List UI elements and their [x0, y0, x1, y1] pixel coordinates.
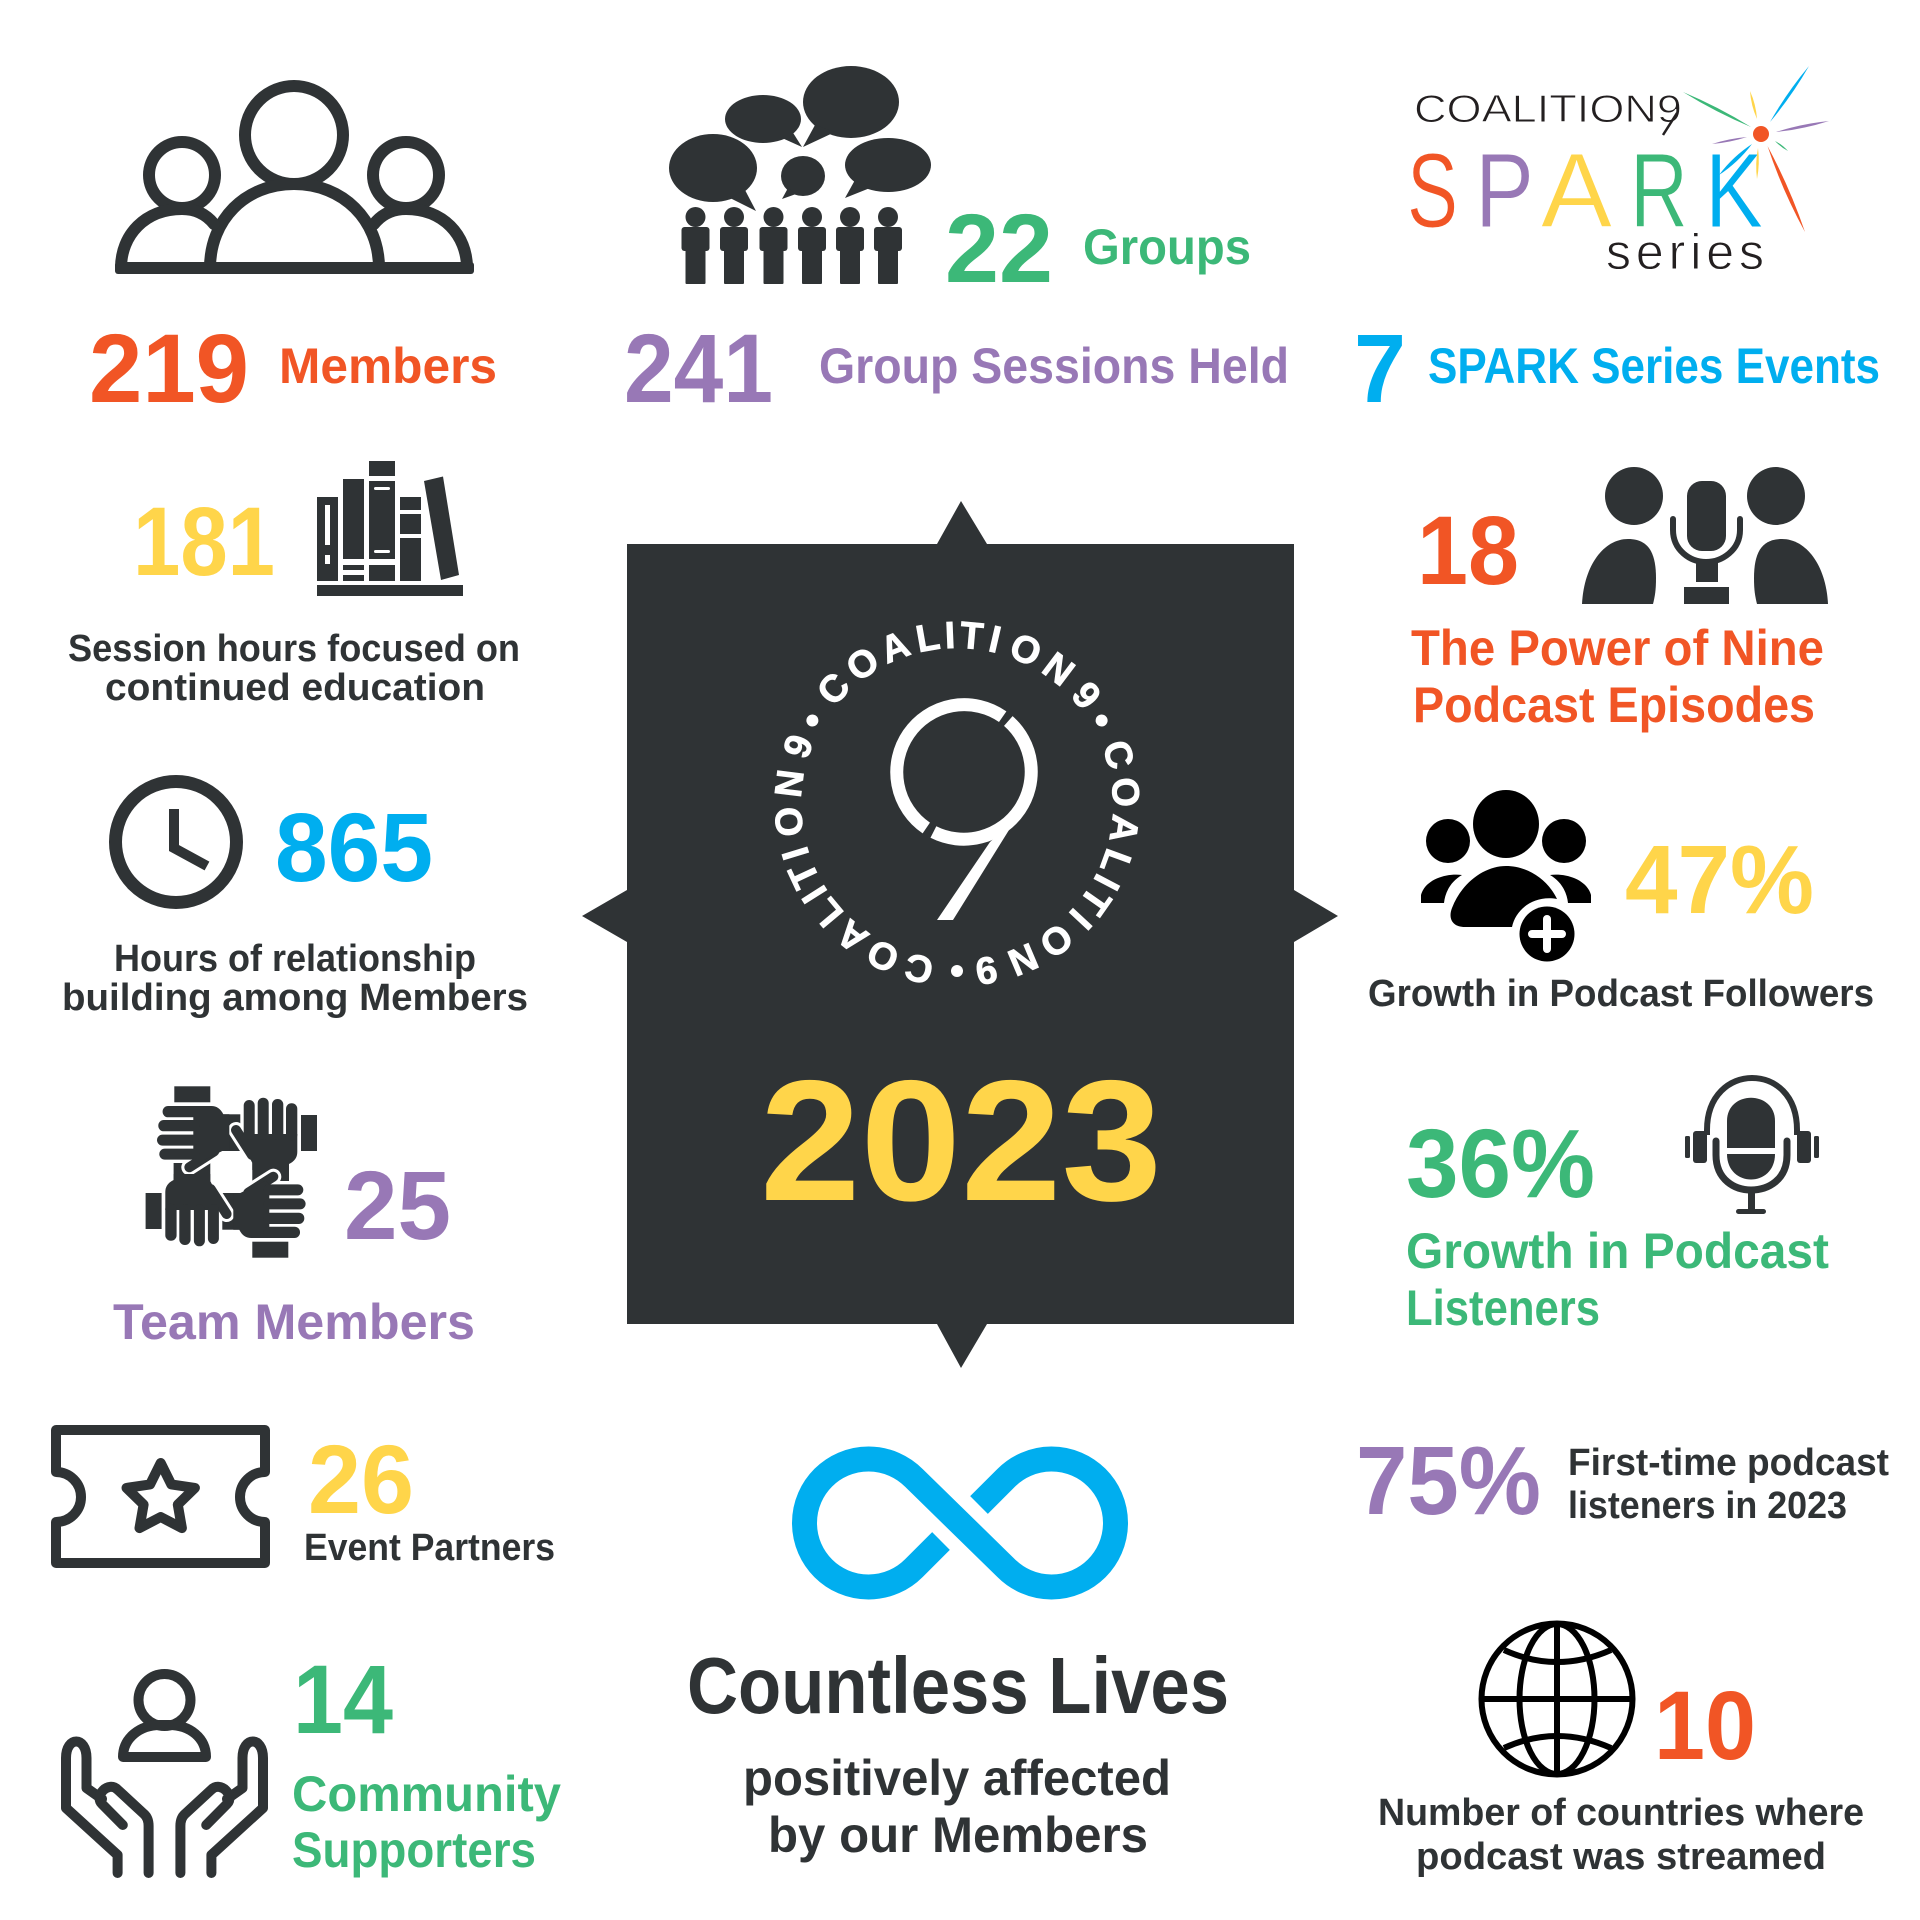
- logo: Coalition9 SPARK series: K: [1705, 132, 1763, 250]
- logo: circular Coalition9 ring text: 9: [776, 729, 822, 764]
- label: Growth in Podcast Listeners: Listeners: [1406, 1280, 1600, 1336]
- logo: circular Coalition9 ring text: L: [805, 890, 852, 934]
- text: number of countries: [1378, 1792, 1864, 1878]
- logo: circular Coalition9 ring text: T: [958, 615, 985, 659]
- label: Groups: Groups: [1083, 219, 1251, 275]
- text: hours of relationship: [62, 938, 528, 1019]
- text: first-time podcast listeners: [1568, 1442, 1889, 1527]
- text: session hours: Session hours focused on: [68, 628, 520, 670]
- icon: books on shelf: [317, 461, 463, 596]
- logo: circular Coalition9 ring text: N: [768, 767, 813, 800]
- label: Group Sessions Held: Group Sessions Held: [819, 338, 1289, 394]
- icon: two people and microphone: [1582, 467, 1828, 604]
- icon: person held in hands: [66, 1674, 263, 1873]
- label: Team Members: Team Members: [113, 1294, 475, 1350]
- text: growth in podcast followers: Growth in Podcast Followers: [1368, 973, 1874, 1015]
- logo: Coalition9 SPARK series: series: [1606, 224, 1764, 280]
- heading: Countless Lives: Countless Lives: [687, 1641, 1229, 1730]
- logo: circular Coalition9 ring text: I: [944, 615, 956, 657]
- stat: 47%: 47%: [1625, 825, 1814, 934]
- icon: ticket with star: [56, 1430, 265, 1563]
- logo: Coalition9 SPARK series: [1407, 66, 1829, 280]
- stat: 241: 241: [624, 314, 773, 423]
- stat: 26: 26: [308, 1425, 414, 1534]
- label: Community Supporters: Supporters: [292, 1822, 536, 1878]
- logo: Coalition9 SPARK series: P: [1475, 132, 1534, 250]
- stat: 865: 865: [275, 793, 433, 902]
- text: first-time podcast listeners: listeners in 2023: [1568, 1485, 1847, 1527]
- stat: 10: 10: [1654, 1671, 1756, 1780]
- icon: group with speech bubbles: [669, 66, 931, 284]
- stat: 25: 25: [344, 1151, 451, 1260]
- stat: 14: 14: [293, 1645, 393, 1754]
- logo: Coalition9 SPARK series: R: [1630, 132, 1688, 250]
- label: The Power of Nine Podcast Episodes: The Power of Nine: [1411, 620, 1824, 676]
- label: Growth in Podcast Listeners: Growth in Podcast: [1406, 1223, 1829, 1279]
- logo: circular Coalition9 ring text: L: [1091, 843, 1139, 880]
- icon: followers plus: [1421, 790, 1591, 962]
- logo: circular Coalition9 ring text: T: [781, 856, 829, 894]
- label: Community Supporters: Community: [292, 1766, 561, 1822]
- logo: circular Coalition9 ring text: O: [861, 930, 906, 980]
- stat: 75%: 75%: [1356, 1426, 1541, 1535]
- text: number of countries: podcast was streamed: [1416, 1836, 1826, 1878]
- icon: headphones and microphone: [1685, 1078, 1819, 1214]
- label: Members: Members: [279, 338, 497, 394]
- label: Community Supporters: [292, 1766, 561, 1878]
- logo: circular Coalition9 ring text: N: [1002, 934, 1043, 983]
- stat: 18: 18: [1417, 496, 1519, 605]
- logo: circular Coalition9 ring text: N: [1035, 645, 1082, 695]
- logo: circular Coalition9 ring text: O: [1103, 776, 1147, 808]
- stat: 219: 219: [89, 314, 249, 423]
- logo: circular Coalition9 ring text: I: [1085, 867, 1127, 896]
- icon: infinity: [804, 1459, 1116, 1587]
- label: The Power of Nine Podcast Episodes: Podcast Episodes: [1413, 677, 1815, 733]
- logo: circular Coalition9 ring text: A: [1100, 812, 1146, 845]
- logo: circular Coalition9 ring text: O: [1031, 914, 1080, 966]
- logo: circular Coalition9 ring text: I: [985, 619, 1005, 662]
- icon: four hands joined: [146, 1086, 317, 1258]
- label: The Power of Nine Podcast Episodes: [1411, 620, 1824, 733]
- logo: circular Coalition9 ring text: 9: [1063, 674, 1109, 718]
- stat: 181: 181: [133, 487, 275, 596]
- logo: circular Coalition9 ring text: T: [1071, 879, 1118, 922]
- logo: circular Coalition9 ring text: I: [795, 878, 836, 910]
- logo: circular Coalition9 ring text: L: [913, 616, 943, 661]
- text: positively affected by our Members: by our Members: [768, 1807, 1148, 1863]
- logo: circular Coalition9 ring text: O: [767, 805, 812, 838]
- logo: Coalition9 SPARK series: COALITION9: [1414, 88, 1682, 131]
- panel: central dark badge: [582, 501, 1338, 1368]
- stat: 22: 22: [945, 194, 1053, 303]
- text: positively affected by our Members: positively affected: [743, 1750, 1171, 1806]
- logo: circular Coalition9 ring text: 9: [972, 947, 1000, 992]
- stat: 7: 7: [1354, 314, 1406, 423]
- label: Growth in Podcast Listeners: [1406, 1223, 1829, 1336]
- logo: circular Coalition9 ring text: C: [1094, 736, 1142, 774]
- logo: Coalition9 SPARK series: S: [1407, 132, 1458, 250]
- logo: circular Coalition9 ring text: I: [1061, 900, 1099, 937]
- text: positively affected by our Members: [743, 1750, 1171, 1863]
- year: 2023: 2023: [760, 1045, 1162, 1237]
- logo: circular Coalition9 ring text: O: [1003, 625, 1047, 676]
- logo: circular Coalition9 ring text: C: [809, 665, 859, 714]
- icon: three members: [115, 86, 474, 274]
- logo: circular Coalition9 ring text: [767, 615, 1147, 992]
- icon: globe: [1482, 1624, 1632, 1774]
- icon: clock: [116, 782, 236, 902]
- text: hours of relationship: building among Members: [62, 977, 528, 1019]
- label: Event Partners: Event Partners: [304, 1527, 555, 1569]
- logo: circular Coalition9 ring text: I: [775, 842, 818, 864]
- stat: 36%: 36%: [1406, 1109, 1595, 1218]
- logo: circular Coalition9 ring text: A: [829, 911, 876, 961]
- text: first-time podcast listeners: First-time podcast: [1568, 1442, 1889, 1484]
- text: hours of relationship: Hours of relationship: [114, 938, 476, 980]
- logo: circular Coalition9 ring text: O: [839, 639, 887, 690]
- text: number of countries: Number of countries where: [1378, 1792, 1864, 1834]
- logo: Coalition9 SPARK series: A: [1541, 132, 1612, 250]
- logo: large stylised 9: [897, 705, 1037, 920]
- logo: circular Coalition9 ring text: A: [875, 623, 916, 672]
- text: session hours: [68, 628, 520, 709]
- logo: circular Coalition9 ring text: C: [901, 944, 937, 991]
- text: session hours: continued education: [105, 667, 485, 709]
